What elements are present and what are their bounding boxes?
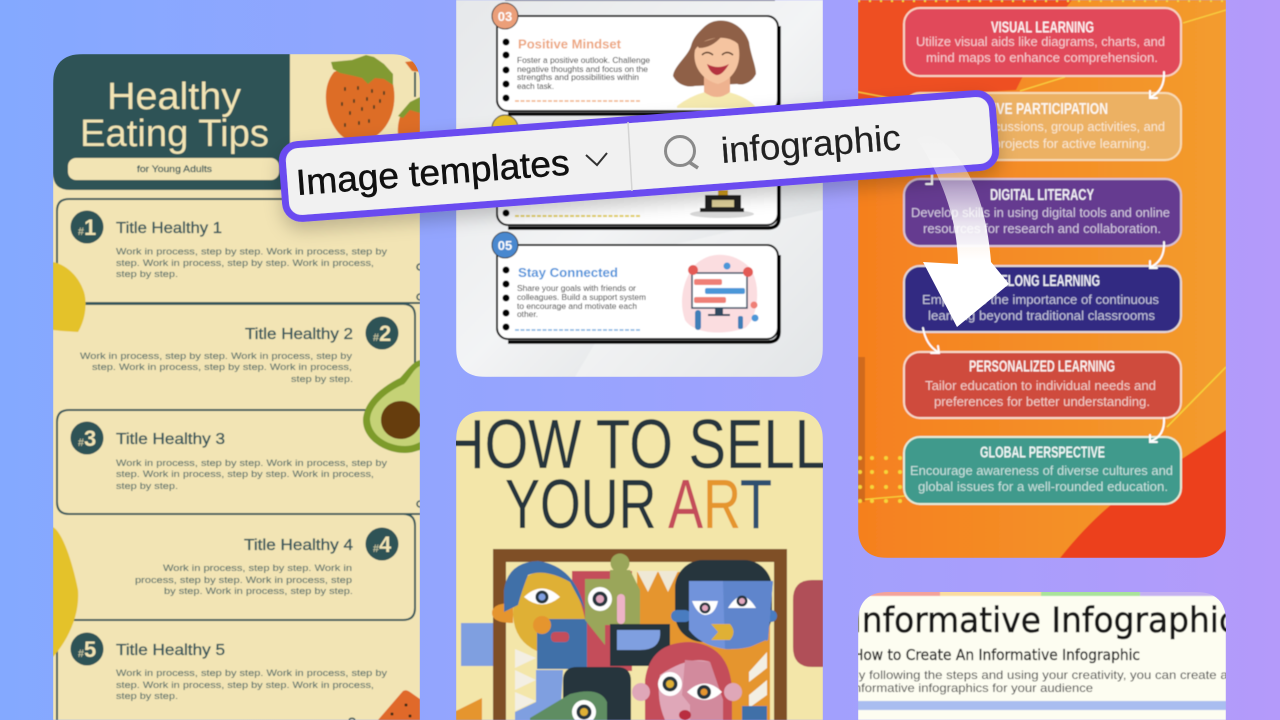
box: personalized learning: preferences for better understanding. bbox=[934, 395, 1150, 409]
box: active participation: ACTIVE PARTICIPATION bbox=[968, 101, 1108, 118]
panel: how to sell your art bbox=[444, 405, 826, 720]
figure: stripes bbox=[515, 640, 767, 720]
icon: watermelon bbox=[378, 690, 420, 720]
badge 03 bbox=[492, 3, 518, 29]
text bbox=[517, 283, 646, 319]
icon: connected screen bbox=[682, 255, 758, 333]
arrow: curved white arrow bbox=[917, 136, 1009, 327]
box: global perspective: global issues for a well-rounded education. bbox=[918, 480, 1168, 494]
heading: Stay Connected bbox=[518, 265, 618, 280]
text: other. bbox=[517, 309, 538, 319]
panel: healthy eating tips bbox=[53, 54, 420, 720]
card text: step. Work in process, step by step. Work in process, bbox=[92, 362, 352, 373]
card text: Work in process, step by step. Work in process, step by bbox=[116, 458, 387, 469]
box: active participation: Encourage discussions, group activities, and bbox=[912, 120, 1165, 134]
badge 5 bbox=[70, 632, 104, 666]
panel: learning strategies bbox=[858, 0, 1226, 558]
card 05 bbox=[492, 232, 779, 342]
card text: step. Work in process, step by step. Work in process, bbox=[116, 469, 374, 480]
icon: strawberries bbox=[326, 55, 420, 145]
badge 04 bbox=[491, 114, 519, 126]
box: active participation: hands-on projects for active learning. bbox=[935, 137, 1150, 151]
icon: lemon top bbox=[53, 262, 86, 332]
box: digital literacy: resources for research and collaboration. bbox=[923, 222, 1161, 236]
box: global perspective bbox=[904, 437, 1181, 504]
badge 3 bbox=[70, 422, 104, 454]
search bar bbox=[281, 92, 997, 220]
title bbox=[444, 405, 826, 543]
icon: chevron bbox=[586, 153, 607, 165]
heading: Positive Mindset bbox=[518, 36, 622, 52]
badge 2: #2 bbox=[373, 321, 391, 346]
description: By following the steps and using your creativity, you can create an bbox=[850, 668, 1235, 682]
card text bbox=[116, 668, 387, 702]
badge 5: #5 bbox=[78, 637, 96, 662]
box: visual learning bbox=[904, 8, 1181, 76]
box: lifelong learning bbox=[904, 266, 1181, 332]
badge 4: #4 bbox=[373, 532, 392, 557]
card text: step by step. bbox=[116, 691, 178, 702]
title: YOUR ART bbox=[505, 465, 772, 543]
badge 05 bbox=[492, 232, 518, 258]
card text: Work in process, step by step. Work in bbox=[163, 563, 352, 574]
text: colleagues. Build a support system bbox=[517, 292, 646, 302]
text bbox=[517, 55, 650, 91]
icon: lemon bottom bbox=[53, 527, 78, 657]
title: Healthy bbox=[107, 76, 241, 118]
text: each task. bbox=[517, 81, 554, 91]
card 4 bbox=[70, 514, 415, 620]
card text: step by step. bbox=[116, 269, 178, 280]
description: informative infographics for your audience bbox=[851, 681, 1093, 695]
figure: green figure bbox=[585, 554, 670, 666]
box: global perspective: Encourage awareness of diverse cultures and bbox=[910, 464, 1173, 478]
card 1 bbox=[57, 199, 420, 303]
search query: infographic bbox=[720, 117, 902, 171]
panel: informative infographic bbox=[850, 591, 1237, 720]
icon: side shapes bbox=[456, 580, 823, 720]
icon: smiling woman bbox=[673, 20, 756, 108]
card 2 bbox=[80, 303, 417, 384]
card text: Work in process, step by step. Work in process, step by bbox=[116, 668, 387, 679]
header block bbox=[53, 54, 290, 190]
subtitle pill: for Young Adults bbox=[137, 163, 212, 174]
badge 2 bbox=[366, 316, 398, 350]
card text: step. Work in process, step by step. Work in process, bbox=[116, 258, 374, 269]
card text: step. Work in process, step by step. Work in process, bbox=[116, 680, 374, 691]
box: lifelong learning: Emphasize the importance of continuous bbox=[922, 293, 1159, 307]
box: visual learning: VISUAL LEARNING bbox=[991, 20, 1094, 36]
icon: magnifier bbox=[666, 136, 698, 168]
dropdown label: Image templates bbox=[295, 142, 571, 203]
divider bbox=[628, 122, 632, 191]
card text: process, step by step. Work in process, step bbox=[135, 575, 352, 586]
card 03 bbox=[492, 3, 779, 114]
card text: Work in process, step by step. Work in process, step by bbox=[80, 351, 352, 362]
box: visual learning: mind maps to enhance comprehension. bbox=[926, 51, 1158, 65]
badge 03: 03 bbox=[498, 9, 512, 24]
text: Share your goals with friends or bbox=[517, 283, 636, 293]
title: HOW TO SELL bbox=[444, 405, 826, 483]
card text: Work in process, step by step. Work in process, step by bbox=[116, 246, 387, 258]
box: digital literacy: DIGITAL LITERACY bbox=[990, 187, 1094, 204]
figure: green bird bbox=[530, 691, 607, 720]
badge 4 bbox=[366, 528, 398, 560]
card text bbox=[116, 458, 387, 492]
connector arrows bbox=[923, 72, 1164, 442]
box: personalized learning: Tailor education to individual needs and bbox=[925, 379, 1156, 393]
panel: mindset cards bbox=[456, 0, 823, 377]
card title: Title Healthy 4 bbox=[244, 537, 353, 554]
figure: black figure bbox=[563, 667, 631, 720]
card title: Title Healthy 1 bbox=[116, 220, 222, 237]
text: Foster a positive outlook. Challenge bbox=[517, 55, 650, 65]
figure: blue face bbox=[671, 560, 777, 649]
subtitle: How to Create An Informative Infographic bbox=[853, 646, 1140, 664]
card 3 bbox=[57, 410, 420, 514]
title bbox=[80, 76, 269, 155]
box: digital literacy bbox=[904, 179, 1181, 246]
box: global perspective: GLOBAL PERSPECTIVE bbox=[980, 444, 1105, 462]
background shapes bbox=[858, 0, 1226, 558]
description bbox=[850, 668, 1235, 695]
subtitle pill bbox=[68, 158, 279, 180]
box: lifelong learning: LIFELONG LEARNING bbox=[984, 273, 1100, 290]
box: visual learning: Utilize visual aids like diagrams, charts, and bbox=[916, 35, 1165, 49]
card 04 bbox=[492, 115, 779, 228]
card text: by step. Work in process, step by step. bbox=[164, 586, 353, 597]
colour strip bbox=[858, 591, 1226, 596]
figure: yellow face bbox=[492, 561, 587, 669]
text: negative thoughts and focus on the bbox=[517, 64, 648, 74]
title: Eating Tips bbox=[80, 113, 269, 155]
figure: pink face bbox=[632, 642, 742, 720]
badge 1 bbox=[70, 210, 104, 244]
card text bbox=[80, 351, 353, 385]
card text: step by step. bbox=[116, 481, 178, 492]
blue rule bbox=[858, 701, 1226, 710]
icon: avocado bbox=[363, 360, 420, 453]
text: strengths and possibilities within bbox=[517, 72, 639, 82]
box: active participation bbox=[904, 93, 1181, 160]
title: Informative Infographic bbox=[852, 601, 1237, 641]
box: personalized learning bbox=[904, 352, 1181, 418]
card title: Title Healthy 5 bbox=[116, 642, 225, 659]
box: personalized learning: PERSONALIZED LEARNING bbox=[969, 358, 1115, 376]
card text bbox=[135, 563, 353, 597]
box: lifelong learning: learning beyond traditional classrooms bbox=[928, 309, 1155, 323]
badge 3: #3 bbox=[78, 426, 96, 451]
card text bbox=[116, 246, 387, 280]
card text: step by step. bbox=[291, 374, 353, 385]
artwork: portrait faces bbox=[492, 549, 787, 720]
card title: Title Healthy 2 bbox=[245, 326, 353, 343]
icon: trophy bbox=[690, 190, 754, 218]
box: digital literacy: Develop skills in using digital tools and online bbox=[911, 206, 1170, 220]
text: to encourage and motivate each bbox=[517, 301, 637, 311]
card title: Title Healthy 3 bbox=[116, 431, 225, 448]
badge 05: 05 bbox=[498, 238, 512, 253]
badge 1: #1 bbox=[78, 215, 96, 240]
card 5 bbox=[57, 632, 387, 720]
